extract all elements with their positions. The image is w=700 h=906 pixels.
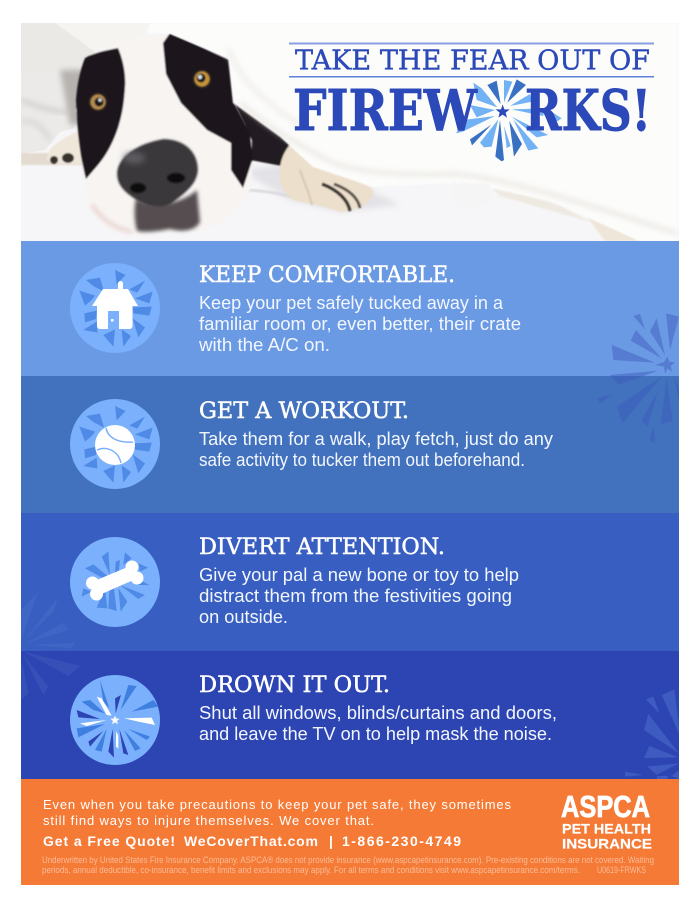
logo: aspca pet health insurance (561, 789, 652, 852)
decorative burst bottom right (625, 689, 679, 779)
footer message (43, 797, 512, 828)
title word: fireworks: FIREW (293, 78, 478, 144)
title rule top (289, 42, 654, 44)
text: divert attention: on outside. (199, 607, 288, 627)
left eye (88, 92, 108, 112)
dog right paw (233, 100, 373, 212)
right eye (192, 70, 212, 88)
decorative burst right (597, 313, 679, 443)
panel: keep comfortable background (21, 241, 679, 376)
muzzle dark chin (135, 190, 200, 232)
title word: fireworks: RKS! (525, 78, 651, 144)
footer call to action: WeCoverThat.com (184, 833, 318, 849)
footer call to action: | (329, 833, 333, 849)
text: keep comfortable: familiar room or, even better, their crate (199, 314, 521, 334)
text: divert attention (199, 535, 519, 627)
icon: tennis ball in burst (70, 399, 160, 489)
footer call to action: 1-866-230-4749 (342, 833, 461, 849)
text: keep comfortable: KEEP COMFORTABLE. (199, 263, 455, 288)
dog left paw (48, 131, 82, 165)
header photo: dog under blanket (21, 23, 679, 241)
text: divert attention: DIVERT ATTENTION. (199, 535, 445, 560)
jowl shading (92, 205, 132, 232)
pillows and sheet (21, 23, 640, 241)
text: drown it out: and leave the TV on to help mask the noise. (199, 724, 552, 744)
icon: firework burst (70, 675, 160, 765)
text: get a workout: safe activity to tucker them out beforehand. (199, 450, 525, 470)
footer call to action: Get a Free Quote! (43, 833, 175, 849)
title burst: firework as letter O (456, 79, 562, 161)
title rule bottom (289, 76, 654, 78)
text: divert attention: distract them from the festivities going (199, 586, 512, 606)
text: keep comfortable (198, 263, 521, 355)
nose (117, 139, 198, 207)
footer call to action (43, 833, 461, 849)
decorative burst left (21, 652, 80, 700)
text: drown it out (199, 673, 557, 744)
text: drown it out: DROWN IT OUT. (199, 673, 390, 698)
title line: take the fear out of: TAKE THE FEAR OUT OF (295, 46, 650, 76)
title word: fireworks (293, 78, 651, 144)
left black patch (76, 48, 125, 179)
panel: drown it out background (21, 651, 679, 779)
right black patch (163, 33, 253, 188)
icon: house in burst (70, 263, 160, 353)
text: drown it out: Shut all windows, blinds/curtains and doors, (199, 703, 557, 723)
text: get a workout: GET A WORKOUT. (199, 399, 409, 424)
panel: divert attention background (21, 513, 679, 651)
footer message: Even when you take precautions to keep your pet safe, they sometimes (43, 797, 512, 812)
panel: orange footer (21, 779, 679, 885)
duvet over dog (55, 23, 679, 241)
footer fine print: U0619-FRWKS (597, 865, 646, 875)
text: divert attention: Give your pal a new bone or toy to help (199, 565, 519, 585)
text: get a workout (199, 399, 553, 470)
text: get a workout: Take them for a walk, play fetch, just do any (199, 429, 553, 449)
footer fine print (42, 855, 654, 875)
logo: aspca pet health insurance: PET HEALTH (562, 820, 651, 836)
footer message: still find ways to injure themselves. We cover that. (43, 813, 374, 828)
footer fine print: periods, annual deductible, co-insurance, benefit limits and exclusions may apply. For all terms and conditions visit www.aspcapetinsurance.com/terms. (42, 865, 580, 875)
text: keep comfortable: Keep your pet safely tucked away in a (199, 293, 504, 313)
logo: aspca pet health insurance: ASPCA (561, 789, 650, 824)
dog head (76, 33, 253, 234)
text: keep comfortable: with the A/C on. (198, 335, 330, 355)
panel: get a workout background (21, 376, 679, 513)
icon: bone in burst (70, 537, 160, 627)
logo: aspca pet health insurance: INSURANCE (562, 836, 652, 852)
